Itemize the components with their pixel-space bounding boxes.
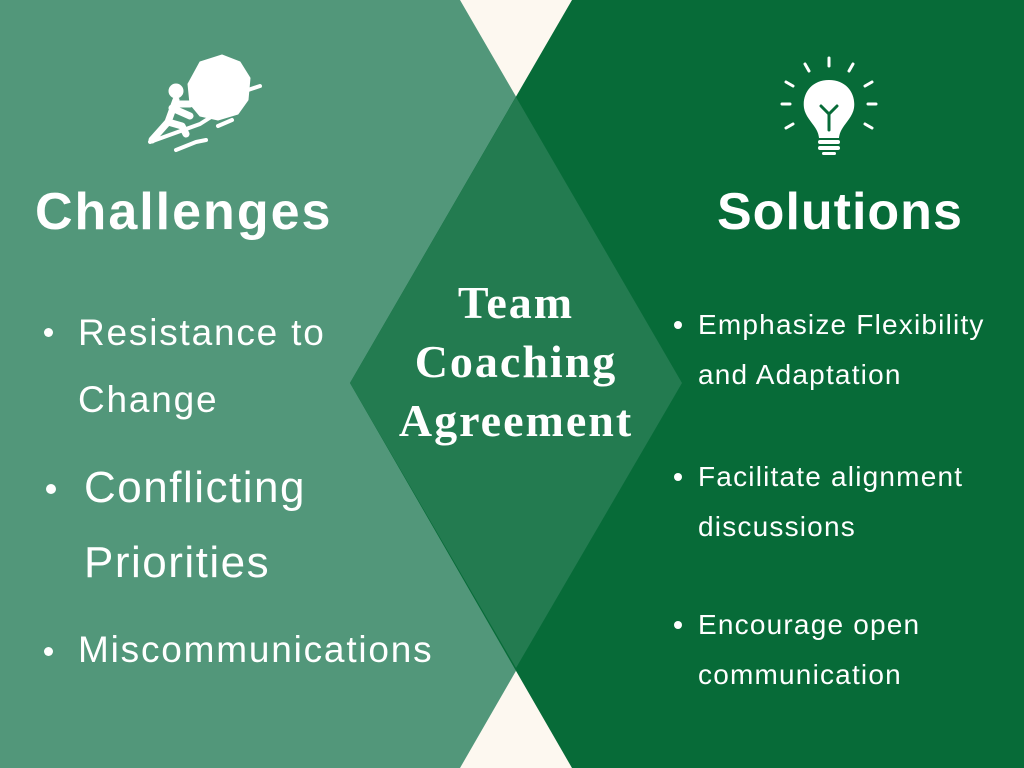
challenges list <box>44 312 433 670</box>
item: miscommunications <box>44 629 433 670</box>
center diamond <box>350 97 682 668</box>
center title: Team <box>458 277 574 328</box>
solutions list: Encourage open <box>698 609 920 640</box>
center title: Coaching <box>415 336 617 387</box>
center title <box>399 277 633 446</box>
center title: Agreement <box>399 395 633 446</box>
challenges list: Conflicting <box>84 463 306 512</box>
item: resistance <box>44 312 326 420</box>
item: alignment <box>674 461 963 542</box>
panel: solutions <box>350 0 1024 768</box>
item: flexibility <box>674 309 985 390</box>
challenges list: Resistance to <box>78 312 326 353</box>
challenges list: Change <box>78 379 218 420</box>
solutions list: Emphasize Flexibility <box>698 309 985 340</box>
heading: Challenges: Challenges <box>35 183 332 241</box>
solutions list: discussions <box>698 511 856 542</box>
solutions list: Facilitate alignment <box>698 461 963 492</box>
solutions list: communication <box>698 659 902 690</box>
solutions list: and Adaptation <box>698 359 902 390</box>
icon: lightbulb <box>782 58 876 155</box>
solutions list <box>674 309 985 690</box>
icon: sisyphus pushing boulder <box>150 55 260 150</box>
heading: Solutions: Solutions <box>717 183 963 241</box>
item: communication <box>674 609 920 690</box>
item: conflicting <box>46 463 306 587</box>
challenges list: Priorities <box>84 538 270 587</box>
challenges list: Miscommunications <box>78 629 433 670</box>
panel: challenges <box>0 0 682 768</box>
